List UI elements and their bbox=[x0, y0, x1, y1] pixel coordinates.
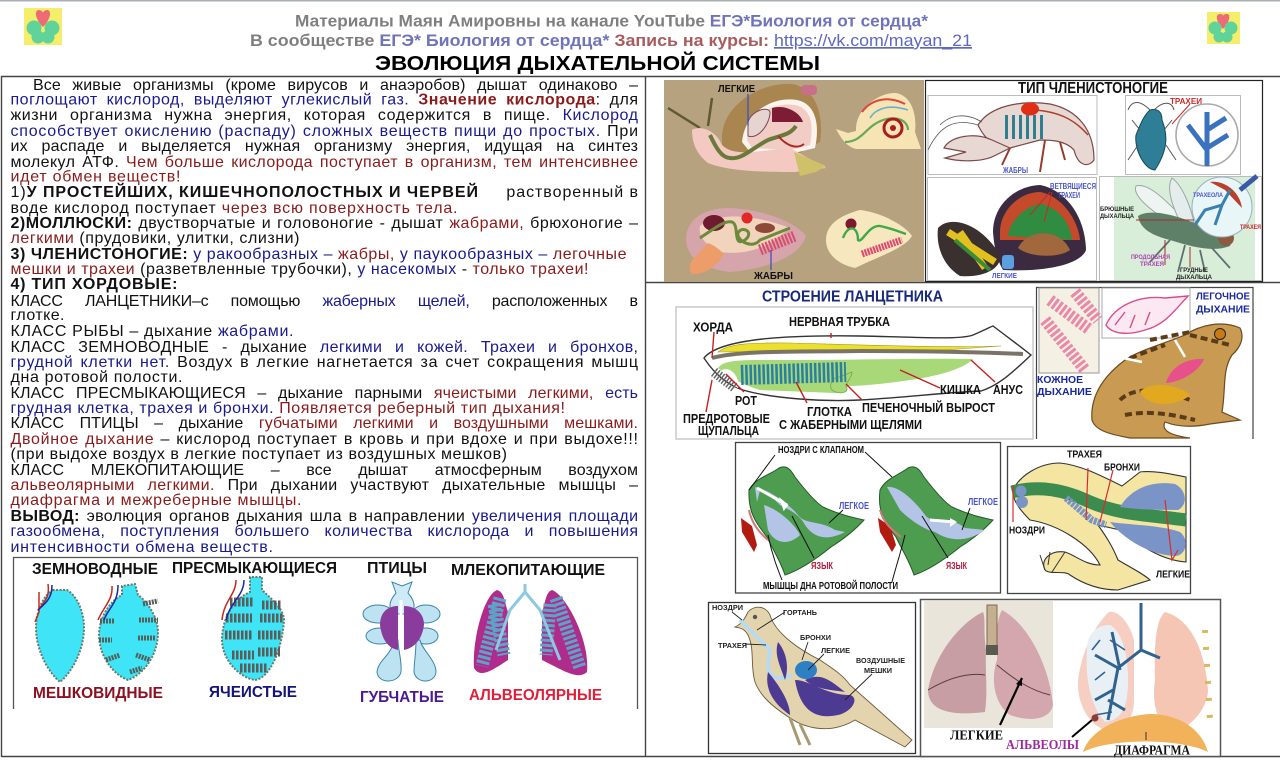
text block: evolution of respiration: альвеолярными легкими. При дыхании участвуют дыхательные мышцы – bbox=[10, 477, 638, 494]
label: lungs: ЛЕГКИЕ bbox=[950, 728, 1003, 744]
lung: amphibian folded sac bbox=[98, 584, 158, 680]
text block: evolution of respiration: 4) ТИП ХОРДОВЫЕ: bbox=[10, 276, 178, 293]
label: bronchi: БРОНХИ bbox=[1104, 462, 1140, 474]
illustration: exhale bbox=[865, 452, 993, 582]
lung: amphibian simple sac bbox=[35, 584, 84, 682]
panel: bird respiration bbox=[708, 602, 916, 754]
panel: lancelet: ЩУПАЛЬЦА bbox=[698, 423, 759, 438]
lung: reptile cellular bbox=[222, 577, 284, 680]
text block: evolution of respiration: грудная клетка, трахея и бронхи. Появляется реберный тип дыхания! bbox=[10, 400, 565, 417]
logo left bbox=[24, 8, 62, 45]
label: skin respiration: КОЖНОЕ bbox=[1037, 374, 1083, 386]
label: diaphragm: ДИАФРАГМА bbox=[1114, 744, 1191, 758]
illustration: clam scheme bbox=[826, 210, 912, 268]
label: nostrils: НОЗДРИ bbox=[1009, 526, 1045, 536]
label: trachea: ТРАХЕЯ bbox=[1240, 225, 1261, 231]
panel: frog respiration: ДЫХАНИЕ bbox=[1196, 304, 1250, 316]
label: alveoli: АЛЬВЕОЛЫ bbox=[1006, 738, 1079, 753]
text block: evolution of respiration: дна ротовой полости. bbox=[10, 369, 182, 386]
text block: evolution of respiration: КЛАСС ЗЕМНОВОДНЫЕ - дыхание легкими и кожей. Трахеи и бронхов, bbox=[10, 339, 638, 356]
text block: evolution of respiration: КЛАСС МЛЕКОПИТАЮЩИЕ – все дышат атмосферным воздухом bbox=[10, 462, 638, 479]
panel: frog respiration: ДЫХАНИЕ bbox=[1037, 386, 1092, 398]
illustration: spider lungs bbox=[928, 178, 1096, 280]
text block: evolution of respiration: грудной клетки нет. Воздух в легкие нагнетается за счет сокращения мышц bbox=[10, 354, 638, 371]
panel: amphibian breathing bbox=[736, 442, 1000, 593]
text block: evolution of respiration: интенсивности обмена веществ. bbox=[10, 539, 273, 556]
illustration: lungs cross-section bbox=[1072, 603, 1210, 752]
title: ЭВОЛЮЦИЯ ДЫХАТЕЛЬНОЙ СИСТЕМЫ bbox=[375, 51, 820, 75]
panel: amphibian breathing: ЛЕГКОЕ bbox=[968, 497, 998, 508]
label: larynx: ГОРТАНЬ bbox=[783, 608, 818, 617]
lung: mammal alveolar bbox=[474, 584, 587, 675]
label: spongy: ГУБЧАТЫЕ bbox=[360, 689, 444, 706]
text block: evolution of respiration: способствует окислению (распаду) сложных веществ пищи до простых. При bbox=[10, 123, 638, 140]
illustration: fly tracheae: ТРАХЕЯ bbox=[1140, 262, 1164, 268]
label: lungs: ЛЕГКИЕ bbox=[821, 646, 850, 655]
lung: bird spongy bbox=[363, 582, 440, 681]
label: lungs: ЛЕГКИЕ bbox=[718, 83, 755, 95]
label: tracheae: ТРАХЕИ bbox=[1058, 191, 1080, 200]
text block: evolution of respiration: (при выдохе воздух в легкие поступает из воздушных мешков) bbox=[10, 446, 507, 463]
text block: evolution of respiration: жизни организма нужна энергия, которая содержится в пище. Кислород bbox=[10, 107, 639, 124]
text block: evolution of respiration: молекул АТФ. Чем больше кислорода поступает в организм, тем интенсивнее bbox=[10, 154, 638, 171]
label: lungs: ЛЕГКИЕ bbox=[1156, 570, 1190, 580]
heading: amphibians: ЗЕМНОВОДНЫЕ bbox=[32, 561, 158, 578]
label: preoral tentacles: ПРЕДРОТОВЫЕ bbox=[683, 411, 770, 426]
label: mouth: РОТ bbox=[735, 393, 757, 408]
heading: mammals: МЛЕКОПИТАЮЩИЕ bbox=[451, 562, 605, 579]
label: bronchi: БРОНХИ bbox=[800, 633, 831, 642]
text block: evolution of respiration: диафрагма и межреберные мышцы. bbox=[10, 492, 302, 509]
label: nostrils: НОЗДРИ bbox=[712, 603, 743, 612]
text block: evolution of respiration: идет обмен веществ! bbox=[10, 168, 180, 186]
label: nostrils with valve: НОЗДРИ С КЛАПАНОМ bbox=[778, 445, 864, 456]
label: hepatic outgrowth: ПЕЧЕНОЧНЫЙ ВЫРОСТ bbox=[862, 400, 995, 415]
panel: frog respiration bbox=[1036, 288, 1253, 439]
label: sac-like: МЕШКОВИДНЫЕ bbox=[33, 685, 163, 702]
text block: evolution of respiration: мешки и трахеи (разветвленные трубочки), у насекомых - только трахеи! bbox=[10, 261, 588, 278]
label: tongue: ЯЗЫК bbox=[811, 561, 834, 572]
text block: evolution of respiration: легкими (прудовики, улитки, слизни) bbox=[10, 230, 300, 247]
label: tracheae: ТРАХЕИ bbox=[1170, 96, 1202, 106]
panel: mollusks bbox=[664, 80, 924, 282]
label: thoracic spiracles: ГРУДНЫЕ bbox=[1180, 268, 1208, 274]
illustration: fly tracheae: ДЫХАЛЬЦА bbox=[1100, 214, 1135, 220]
heading: birds: ПТИЦЫ bbox=[367, 560, 427, 577]
text block: evolution of respiration: 1)У ПРОСТЕЙШИХ, КИШЕЧНОПОЛОСТНЫХ И ЧЕРВЕЙ растворенный в bbox=[10, 182, 638, 201]
text block: evolution of respiration: КЛАСС ПРЕСМЫКАЮЩИЕСЯ – дыхание парными ячеистыми легкими, есть bbox=[10, 385, 638, 402]
text block: evolution of respiration: их распаде и выделяется нужная организму энергия, идущая на синтез bbox=[10, 138, 638, 155]
panel: lancelet bbox=[676, 307, 1033, 439]
header line 2: В сообществе ЕГЭ* Биология от сердца* Запись на курсы: https://vk.com/mayan_21 bbox=[250, 31, 972, 50]
label: air sacs: ВОЗДУШНЫЕ bbox=[856, 656, 905, 665]
header line 1: Материалы Маян Амировны на канале YouTube ЕГЭ*Биология от сердца* bbox=[295, 12, 928, 30]
illustration: snail anatomy bbox=[668, 83, 826, 176]
label: tracheole: ТРАХЕОЛА bbox=[1193, 193, 1224, 199]
illustration: clam anatomy bbox=[686, 208, 806, 282]
panel: arthropods bbox=[926, 80, 1262, 282]
text block: evolution of respiration: Все живые организмы (кроме вирусов и анаэробов) дышат одинаково – bbox=[33, 77, 638, 94]
heading: arthropods type: ТИП ЧЛЕНИСТОНОГИЕ bbox=[1018, 80, 1168, 97]
text block: evolution of respiration: глотке. bbox=[10, 307, 64, 324]
label: gills: ЖАБРЫ bbox=[753, 270, 793, 282]
label: mouth floor muscles: МЫШЦЫ ДНА РОТОВОЙ ПОЛОСТИ bbox=[763, 579, 898, 592]
label: pharynx: ГЛОТКА bbox=[807, 404, 853, 419]
text block: evolution of respiration: поглощают кислород, выделяют углекислый газ. Значение кислорода: для bbox=[10, 92, 638, 108]
illustration: fly tracheae: ДЫХАЛЬЦА bbox=[1176, 275, 1213, 281]
label: lungs: ЛЕГКИЕ bbox=[992, 271, 1017, 280]
label: gills: ЖАБРЫ bbox=[1002, 166, 1028, 175]
panel: amphibian breathing: ЯЗЫК bbox=[946, 561, 968, 572]
illustration: lungs exterior bbox=[928, 605, 1053, 725]
heading: lancelet structure: СТРОЕНИЕ ЛАНЦЕТНИКА bbox=[762, 288, 943, 306]
text block: evolution of respiration bbox=[10, 77, 639, 556]
illustration: frog body bbox=[1092, 324, 1242, 438]
label: trachea: ТРАХЕЯ bbox=[718, 641, 747, 650]
heading: reptiles: ПРЕСМЫКАЮЩИЕСЯ bbox=[172, 560, 337, 577]
text block: evolution of respiration: воде кислород поступает через всю поверхность тела. bbox=[10, 200, 458, 217]
illustration: fly tracheae bbox=[1100, 176, 1262, 281]
text block: evolution of respiration: 2)МОЛЛЮСКИ: двустворчатые и головоногие - дышат жабрами, брюхоногие – bbox=[10, 215, 638, 232]
label: cellular: ЯЧЕИСТЫЕ bbox=[209, 684, 297, 701]
illustration: bird body bbox=[735, 607, 912, 747]
label: longitudinal trachea: ПРОДОЛЬНАЯ bbox=[1131, 255, 1170, 261]
panel: bird respiration: МЕШКИ bbox=[864, 666, 892, 675]
text block: evolution of respiration: Двойное дыхание – кислород поступает в кровь и при вдохе и при выдохе!!! bbox=[10, 431, 638, 448]
text block: evolution of respiration: КЛАСС ЛАНЦЕТНИКИ–с помощью жаберных щелей, расположенных в bbox=[10, 293, 638, 310]
label: with gill slits: С ЖАБЕРНЫМИ ЩЕЛЯМИ bbox=[779, 417, 922, 432]
panel: amphibian lungs bbox=[1008, 446, 1190, 594]
label: alveolar: АЛЬВЕОЛЯРНЫЕ bbox=[469, 687, 602, 704]
text block: evolution of respiration: газообмена, поступления большего количества кислорода и повышения bbox=[10, 523, 638, 540]
label: lung: ЛЕГКОЕ bbox=[839, 501, 869, 512]
label: anus: АНУС bbox=[993, 382, 1023, 397]
illustration: crayfish gills bbox=[928, 96, 1097, 175]
label: branching tracheae: ВЕТВЯЩИЕСЯ bbox=[1050, 182, 1096, 191]
label: neural tube: НЕРВНАЯ ТРУБКА bbox=[789, 314, 891, 329]
panel: human lungs bbox=[920, 600, 1220, 758]
label: abdominal spiracles: БРЮШНЫЕ bbox=[1100, 207, 1134, 213]
illustration: inhale bbox=[741, 455, 864, 580]
text block: evolution of respiration: 3) ЧЛЕНИСТОНОГИЕ: у ракообразных – жабры, у паукообразных – легочные bbox=[10, 246, 627, 263]
label: intestine: КИШКА bbox=[940, 382, 982, 397]
text block: evolution of respiration: ВЫВОД: эволюция органов дыхания шла в направлении увеличения площади bbox=[10, 508, 638, 525]
text block: evolution of respiration: КЛАСС ПТИЦЫ – дыхание губчатыми легкими и воздушными мешками. bbox=[10, 415, 638, 432]
label: trachea: ТРАХЕЯ bbox=[1067, 450, 1102, 460]
illustration: snail scheme bbox=[836, 93, 921, 149]
illustration: insect tracheae bbox=[1126, 96, 1240, 174]
label: pulmonary respiration: ЛЕГОЧНОЕ bbox=[1196, 290, 1250, 302]
panel: lung types comparison bbox=[14, 558, 638, 709]
label: notochord: ХОРДА bbox=[693, 320, 734, 334]
logo right bbox=[1207, 12, 1240, 44]
text block: evolution of respiration: КЛАСС РЫБЫ – дыхание жабрами. bbox=[10, 323, 294, 340]
